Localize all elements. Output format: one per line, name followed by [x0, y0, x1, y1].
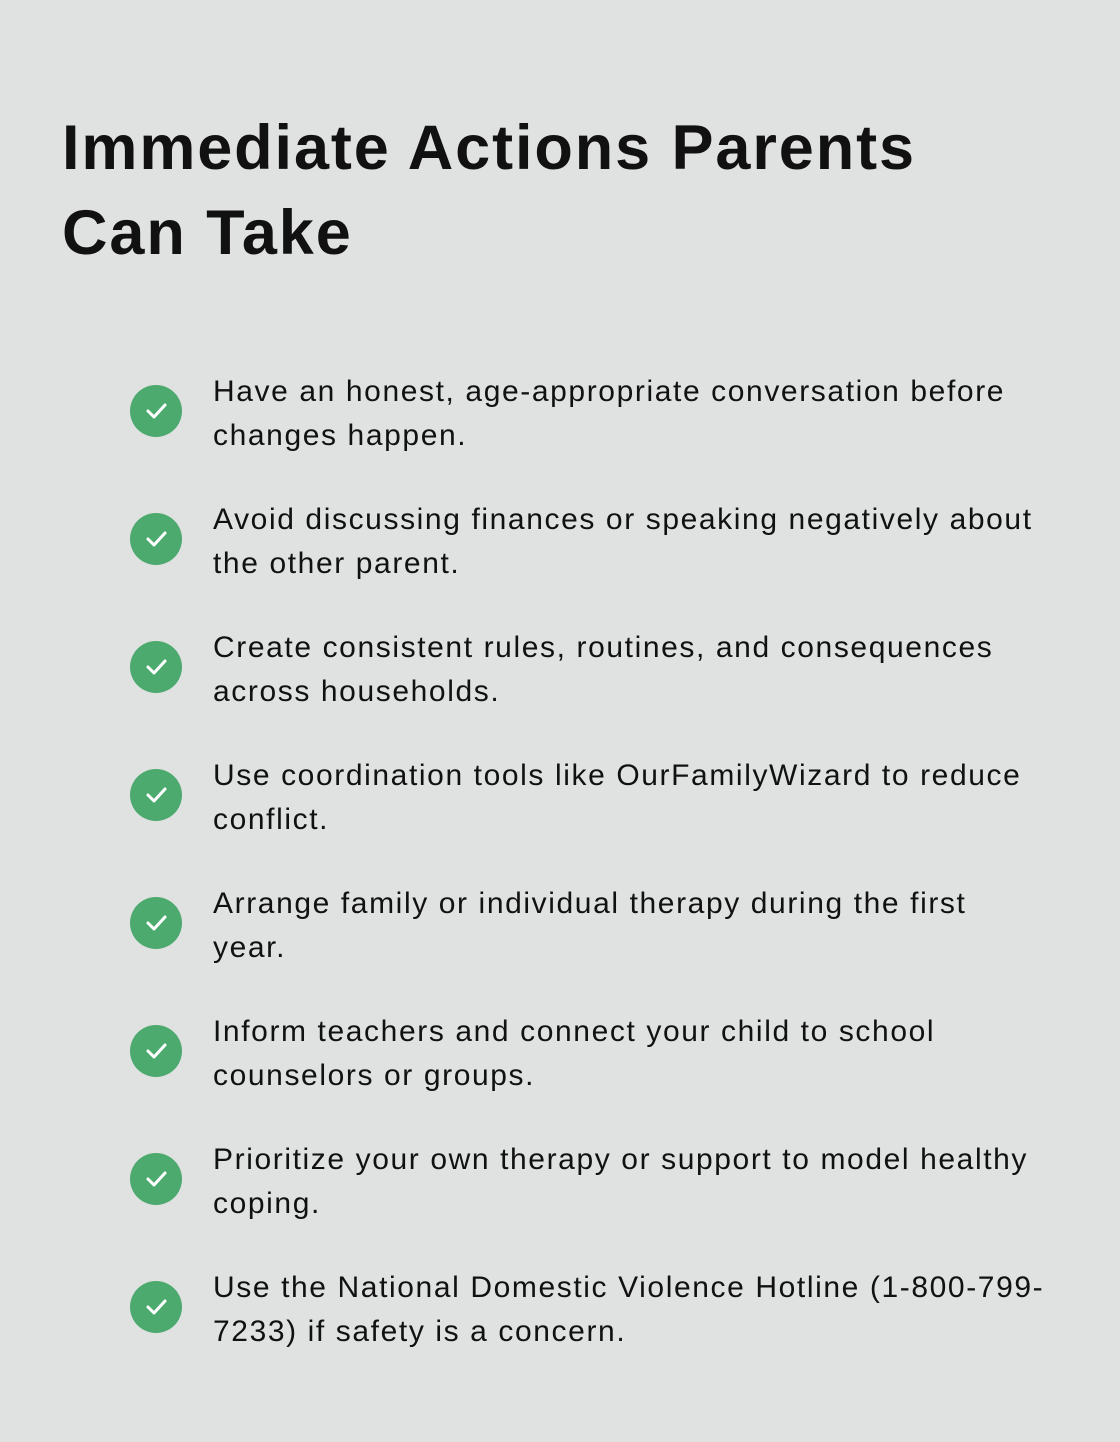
text: Use coordination tools like OurFamilyWizard to reduce [213, 759, 1021, 792]
text [213, 1143, 1028, 1220]
text [213, 887, 966, 964]
text [213, 1015, 935, 1092]
title: Immediate Actions Parents [62, 113, 916, 183]
icon: check [130, 385, 182, 437]
icon: check [130, 1025, 182, 1077]
text [213, 1271, 1044, 1348]
icon: check [130, 1153, 182, 1205]
title: Can Take [62, 198, 353, 268]
title [62, 113, 916, 268]
icon: check [130, 769, 182, 821]
text [213, 503, 1033, 580]
text: Arrange family or individual therapy during the first [213, 887, 966, 920]
text: year. [213, 931, 286, 964]
text [213, 759, 1021, 836]
icon: check [130, 897, 182, 949]
item 5 [130, 887, 966, 964]
icon: check [130, 513, 182, 565]
item 7 [130, 1143, 1028, 1220]
text [213, 631, 993, 708]
text: counselors or groups. [213, 1059, 535, 1092]
text [213, 375, 1005, 452]
item 1 [130, 375, 1005, 452]
text: across households. [213, 675, 500, 708]
item 4 [130, 759, 1021, 836]
text: Create consistent rules, routines, and consequences [213, 631, 993, 664]
text: Avoid discussing finances or speaking negatively about [213, 503, 1033, 536]
item 6 [130, 1015, 935, 1092]
text: Have an honest, age-appropriate conversation before [213, 375, 1005, 408]
item 8 [130, 1271, 1044, 1348]
text: Use the National Domestic Violence Hotline (1-800-799- [213, 1271, 1044, 1304]
text: Prioritize your own therapy or support to model healthy [213, 1143, 1028, 1176]
icon: check [130, 641, 182, 693]
text: conflict. [213, 803, 329, 836]
text: changes happen. [213, 419, 467, 452]
item 2 [130, 503, 1033, 580]
text: the other parent. [213, 547, 460, 580]
text: Inform teachers and connect your child to school [213, 1015, 935, 1048]
text: coping. [213, 1187, 321, 1220]
item 3 [130, 631, 993, 708]
icon: check [130, 1281, 182, 1333]
text: 7233) if safety is a concern. [213, 1315, 626, 1348]
